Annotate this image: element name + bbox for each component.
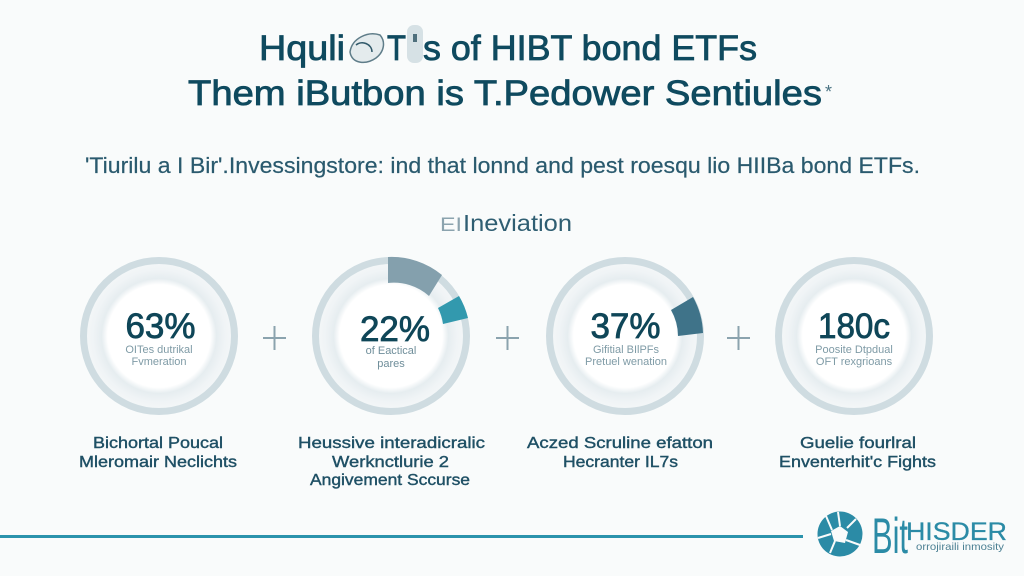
caption 3 xyxy=(527,435,713,471)
icon: plus 2 xyxy=(496,326,519,350)
caption 1: Mleromair Neclichts xyxy=(79,454,237,471)
title: T xyxy=(387,29,406,68)
caption 2: Heussive interadicralic xyxy=(298,435,485,452)
chart segment: teal xyxy=(438,296,468,324)
chart segment: dark teal xyxy=(671,297,703,336)
caption 3: Aczed Scruline efatton xyxy=(527,435,713,452)
caption 2 xyxy=(298,435,485,489)
title: s of HIBT bond ETFs xyxy=(423,29,757,68)
panel: metric 63%: OITes dutrikal xyxy=(125,344,193,356)
logo: HISDER xyxy=(906,518,1007,546)
panel: metric 22%: 22% xyxy=(360,310,430,349)
icon: title ornament xyxy=(350,25,423,63)
panel: metric 180c: Poosite Dtpdual xyxy=(815,344,893,356)
panel: metric 37% xyxy=(550,260,703,412)
logo xyxy=(818,508,1007,564)
title: Hquli xyxy=(259,29,345,68)
caption 3: Hecranter IL7s xyxy=(563,454,678,471)
title: * xyxy=(825,82,832,102)
footer rule xyxy=(0,535,803,538)
caption 2: Angivement Sccurse xyxy=(310,472,470,489)
panel: metric 37%: Gifitial BIlPFs xyxy=(593,344,660,356)
panel: metric 63%: Fvmeration xyxy=(131,356,187,368)
chart segment: grey xyxy=(388,257,442,296)
panel: metric 22%: of Eactical xyxy=(366,345,416,357)
panel: metric 180c: 180c xyxy=(818,307,890,346)
logo: Bit xyxy=(872,508,908,564)
caption 4: Enventerhit'c Fights xyxy=(779,454,936,471)
panel: metric 63%: 63% xyxy=(125,307,196,346)
panel: metric 180c xyxy=(778,260,930,412)
icon: plus 3 xyxy=(727,326,750,350)
caption 1 xyxy=(79,435,237,471)
panel: metric 22% xyxy=(316,257,468,412)
panel: metric 180c: OFT rexgrioans xyxy=(816,356,893,368)
icon: logo mark xyxy=(818,512,862,556)
caption 4 xyxy=(779,435,936,471)
panel: metric 37%: 37% xyxy=(590,307,661,346)
panel: metric 63% xyxy=(84,260,234,412)
title: Them iButbon is T.Pedower Sentiules xyxy=(188,74,822,113)
logo: orrojiraili inmosity xyxy=(916,541,1005,553)
icon: plus 1 xyxy=(263,326,286,350)
caption 1: Bichortal Poucal xyxy=(93,435,223,452)
section label: Ineviation xyxy=(463,210,572,236)
panel: metric 37%: Pretuel wenation xyxy=(585,356,667,368)
caption 4: Guelie fourlral xyxy=(800,435,916,452)
subtitle: 'Tiurilu a I Bir'.Invessingstore: ind that lonnd and pest roesqu lio HIIBa bond ETFs. xyxy=(85,153,920,178)
title xyxy=(188,29,832,113)
panel: metric 22%: pares xyxy=(377,358,405,370)
caption 2: Werknctlurie 2 xyxy=(332,454,449,471)
section label: EI xyxy=(440,215,462,236)
